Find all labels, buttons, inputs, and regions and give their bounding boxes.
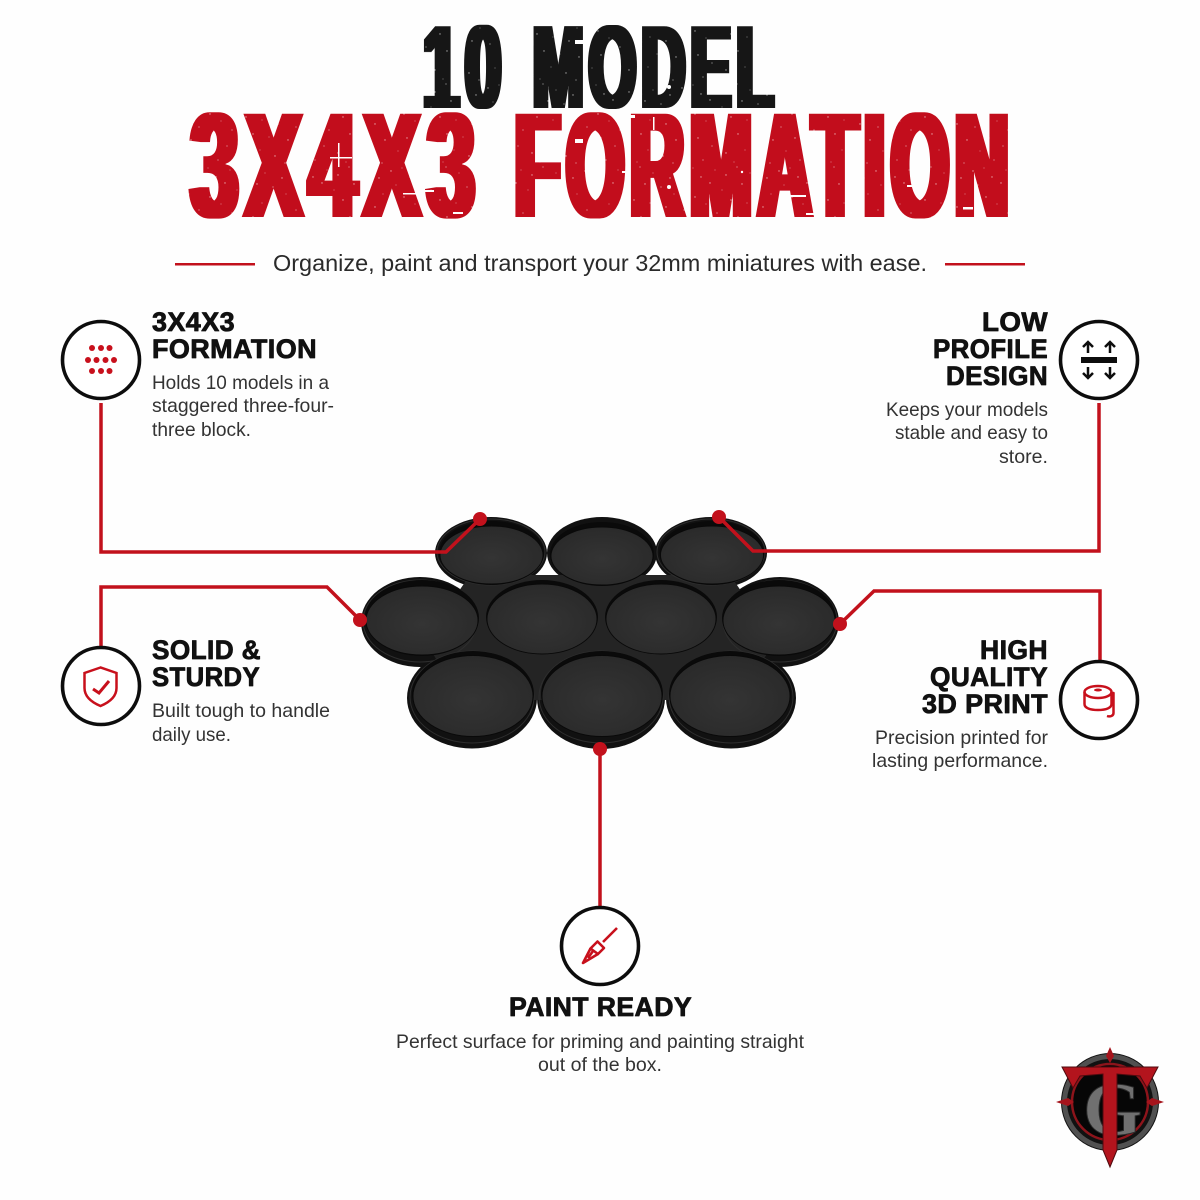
product: 10 model movement tray bbox=[361, 517, 839, 749]
heading bbox=[933, 307, 1048, 391]
panel: paint ready bbox=[396, 908, 805, 1076]
heading: DESIGN bbox=[946, 361, 1048, 391]
heading bbox=[152, 307, 317, 364]
description: staggered three-four- bbox=[152, 395, 334, 417]
title line two: 3X4X3 FORMATION bbox=[191, 81, 1015, 249]
description: daily use. bbox=[152, 724, 231, 746]
description: three block. bbox=[152, 419, 251, 441]
title line one: 10 MODEL: MODEL bbox=[533, 1, 779, 134]
heading: QUALITY bbox=[930, 662, 1048, 692]
icon: low profile arrows bbox=[1060, 322, 1138, 398]
title bbox=[180, 1, 1020, 249]
icon: filament spool bbox=[1060, 662, 1138, 738]
icon: shield with check bbox=[62, 648, 140, 724]
connector: high quality 3d print bbox=[840, 591, 1100, 661]
heading: SOLID & bbox=[152, 635, 261, 665]
well painting surfaces bbox=[366, 526, 835, 736]
logo G letter: G bbox=[1083, 1068, 1142, 1152]
description bbox=[152, 372, 334, 441]
callout anchor dots bbox=[353, 510, 847, 756]
panel: 3x4x3 formation bbox=[62, 307, 334, 441]
heading bbox=[922, 635, 1048, 719]
description bbox=[152, 700, 330, 746]
title line two: 3X4X3 FORMATION: 3X4X3 bbox=[191, 81, 482, 249]
description bbox=[396, 1031, 805, 1076]
tray rim highlights bbox=[363, 519, 837, 743]
description: Keeps your models bbox=[886, 399, 1048, 421]
icon: dot formation bbox=[62, 322, 140, 398]
connector: paint ready bbox=[598, 749, 602, 906]
callout connector lines bbox=[101, 403, 1100, 906]
heading: 3X4X3 bbox=[152, 307, 235, 337]
description: Holds 10 models in a bbox=[152, 372, 329, 394]
tray deck bbox=[425, 575, 775, 700]
heading: 3D PRINT bbox=[922, 689, 1048, 719]
description: store. bbox=[999, 446, 1048, 468]
connector: low profile design bbox=[719, 403, 1099, 551]
description: Precision printed for bbox=[875, 727, 1048, 749]
description bbox=[886, 399, 1048, 468]
icon: paint brush bbox=[562, 908, 638, 984]
logo spikes bbox=[1056, 1047, 1164, 1106]
well recess walls bbox=[365, 521, 836, 737]
heading: PROFILE bbox=[933, 334, 1048, 364]
title distress marks bbox=[330, 40, 973, 215]
heading: LOW bbox=[982, 307, 1048, 337]
description: stable and easy to bbox=[895, 422, 1048, 444]
description: lasting performance. bbox=[872, 750, 1048, 772]
panel: low profile design bbox=[886, 307, 1138, 468]
connector: solid and sturdy bbox=[101, 587, 360, 647]
heading bbox=[152, 635, 261, 692]
subtitle: Organize, paint and transport your 32mm miniatures with ease. bbox=[273, 250, 927, 276]
title speckle texture bbox=[180, 20, 1020, 225]
heading: STURDY bbox=[152, 662, 260, 692]
description bbox=[872, 727, 1048, 772]
heading: FORMATION bbox=[152, 334, 317, 364]
description: out of the box. bbox=[538, 1054, 662, 1076]
logo T letter bbox=[1062, 1067, 1158, 1167]
title line one: 10 MODEL: 10 bbox=[423, 1, 507, 134]
title line one: 10 MODEL bbox=[423, 1, 779, 134]
description: Built tough to handle bbox=[152, 700, 330, 722]
panel: high quality 3d print bbox=[872, 635, 1138, 772]
heading: HIGH bbox=[980, 635, 1048, 665]
logo outer ring bbox=[1061, 1053, 1159, 1151]
connector: 3x4x3 formation bbox=[101, 403, 480, 552]
heading: PAINT READY bbox=[509, 992, 692, 1022]
panel: solid and sturdy bbox=[62, 635, 330, 746]
tray outer silhouette bbox=[361, 517, 839, 749]
logo: TG emblem bbox=[1056, 1047, 1164, 1167]
description: Perfect surface for priming and painting straight bbox=[396, 1031, 805, 1053]
